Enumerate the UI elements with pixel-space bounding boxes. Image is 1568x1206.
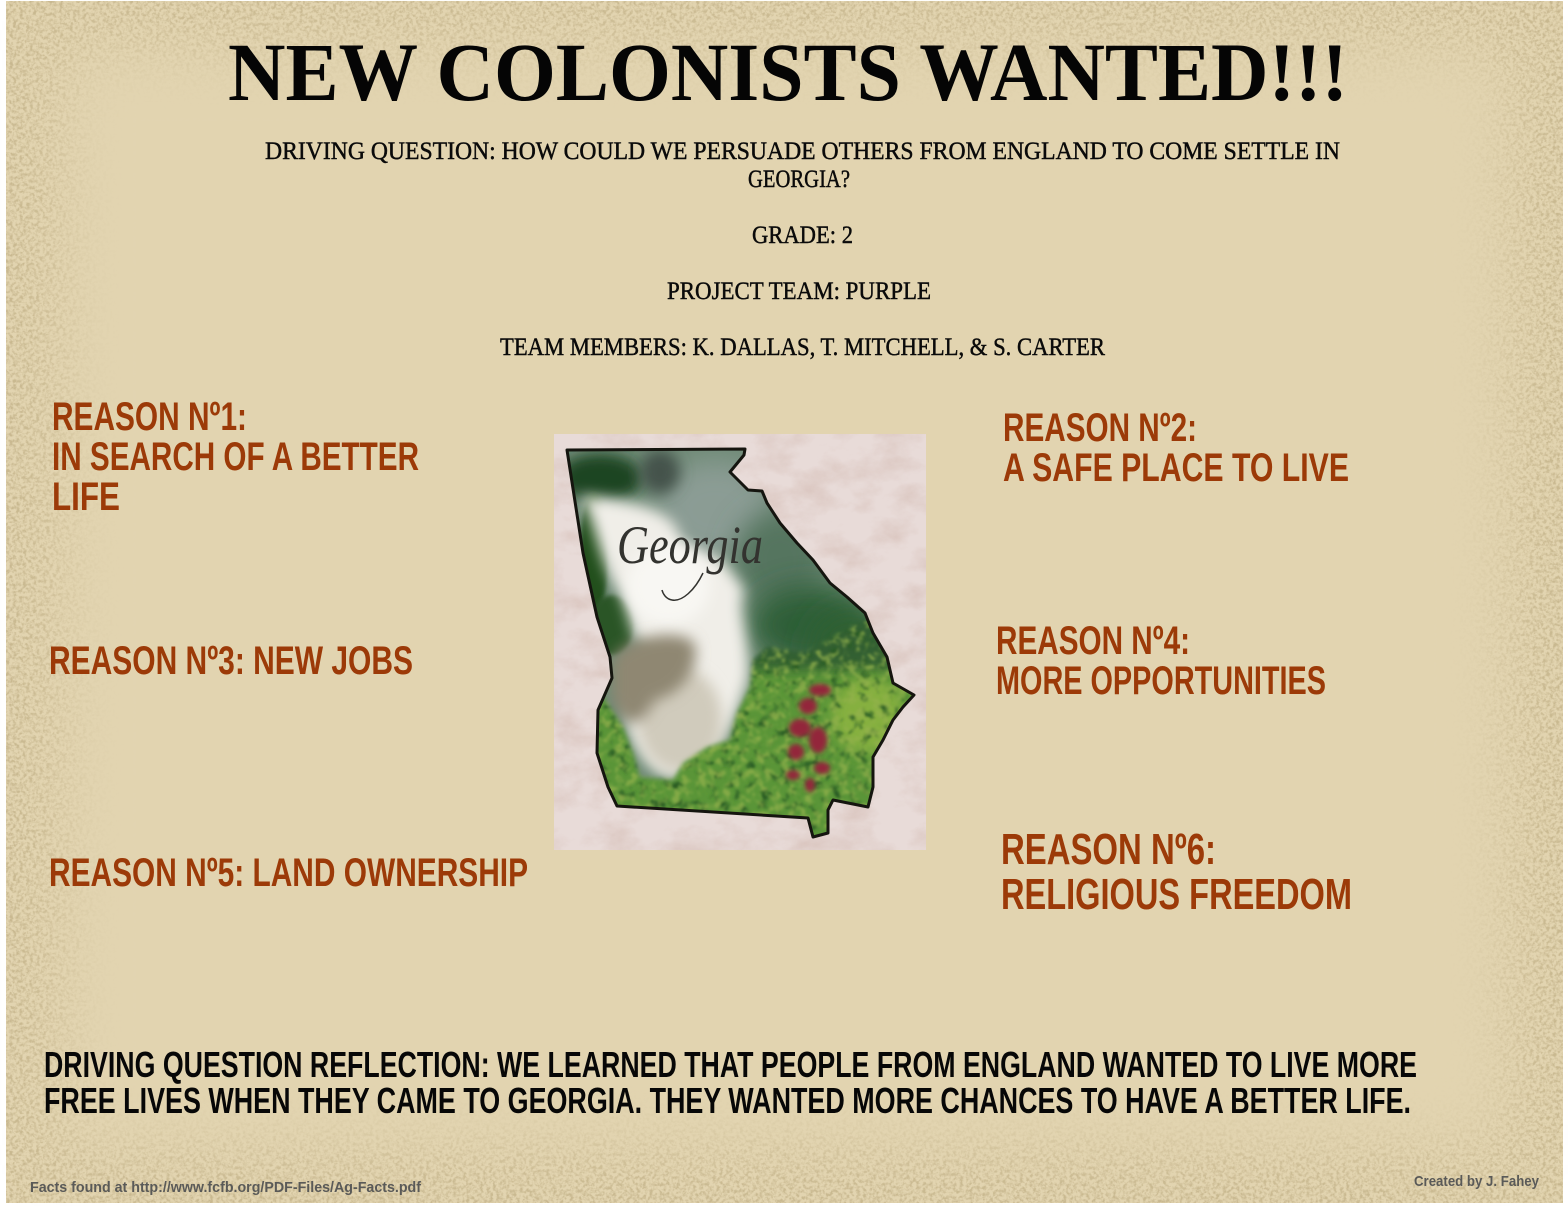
state shape with waterfall scene: [568, 450, 912, 836]
title: NEW COLONISTS WANTED!!!: [228, 26, 1348, 118]
reason 1: REASON Nº1:: [52, 395, 247, 439]
reason 2: [1003, 406, 1349, 490]
footer source: Facts found at http://www.fcfb.org/PDF-Files/Ag-Facts.pdf: [30, 1179, 422, 1196]
grade: GRADE: 2: [752, 222, 853, 249]
picture background: [554, 434, 926, 850]
red flowers: [786, 684, 831, 792]
driving question: GEORGIA?: [748, 166, 850, 193]
reason 4: REASON Nº4:: [996, 619, 1190, 663]
reason 1: [52, 395, 419, 519]
foliage: [598, 620, 912, 835]
team members: TEAM MEMBERS: K. DALLAS, T. MITCHELL, & S. CARTER: [500, 334, 1105, 361]
driving question reflection: [44, 1044, 1417, 1121]
reason 2: A SAFE PLACE TO LIVE: [1003, 446, 1349, 490]
driving question: DRIVING QUESTION: HOW COULD WE PERSUADE OTHERS FROM ENGLAND TO COME SETTLE IN: [265, 138, 1340, 165]
reason 6: RELIGIOUS FREEDOM: [1001, 870, 1352, 919]
reason 1: IN SEARCH OF A BETTER: [52, 435, 419, 479]
waterfall: [580, 495, 749, 778]
river pool: [612, 635, 696, 722]
reason 1: LIFE: [52, 475, 120, 519]
georgia map picture: [554, 434, 926, 850]
reason 4: [996, 619, 1326, 703]
state outline: [567, 449, 914, 837]
reason 2: REASON Nº2:: [1003, 406, 1197, 450]
reason 4: MORE OPPORTUNITIES: [996, 659, 1326, 703]
reason 3: REASON Nº3: NEW JOBS: [49, 639, 413, 683]
georgia script label: Georgia: [617, 515, 763, 575]
reason 6: REASON Nº6:: [1001, 825, 1216, 874]
project team: PROJECT TEAM: PURPLE: [667, 278, 931, 305]
project details: [265, 138, 1340, 361]
georgia script label: [617, 515, 763, 600]
reason 6: [1001, 825, 1352, 919]
driving question: [265, 138, 1340, 193]
reason 5: REASON Nº5: LAND OWNERSHIP: [49, 851, 528, 895]
footer credit: Created by J. Fahey: [1414, 1173, 1540, 1190]
